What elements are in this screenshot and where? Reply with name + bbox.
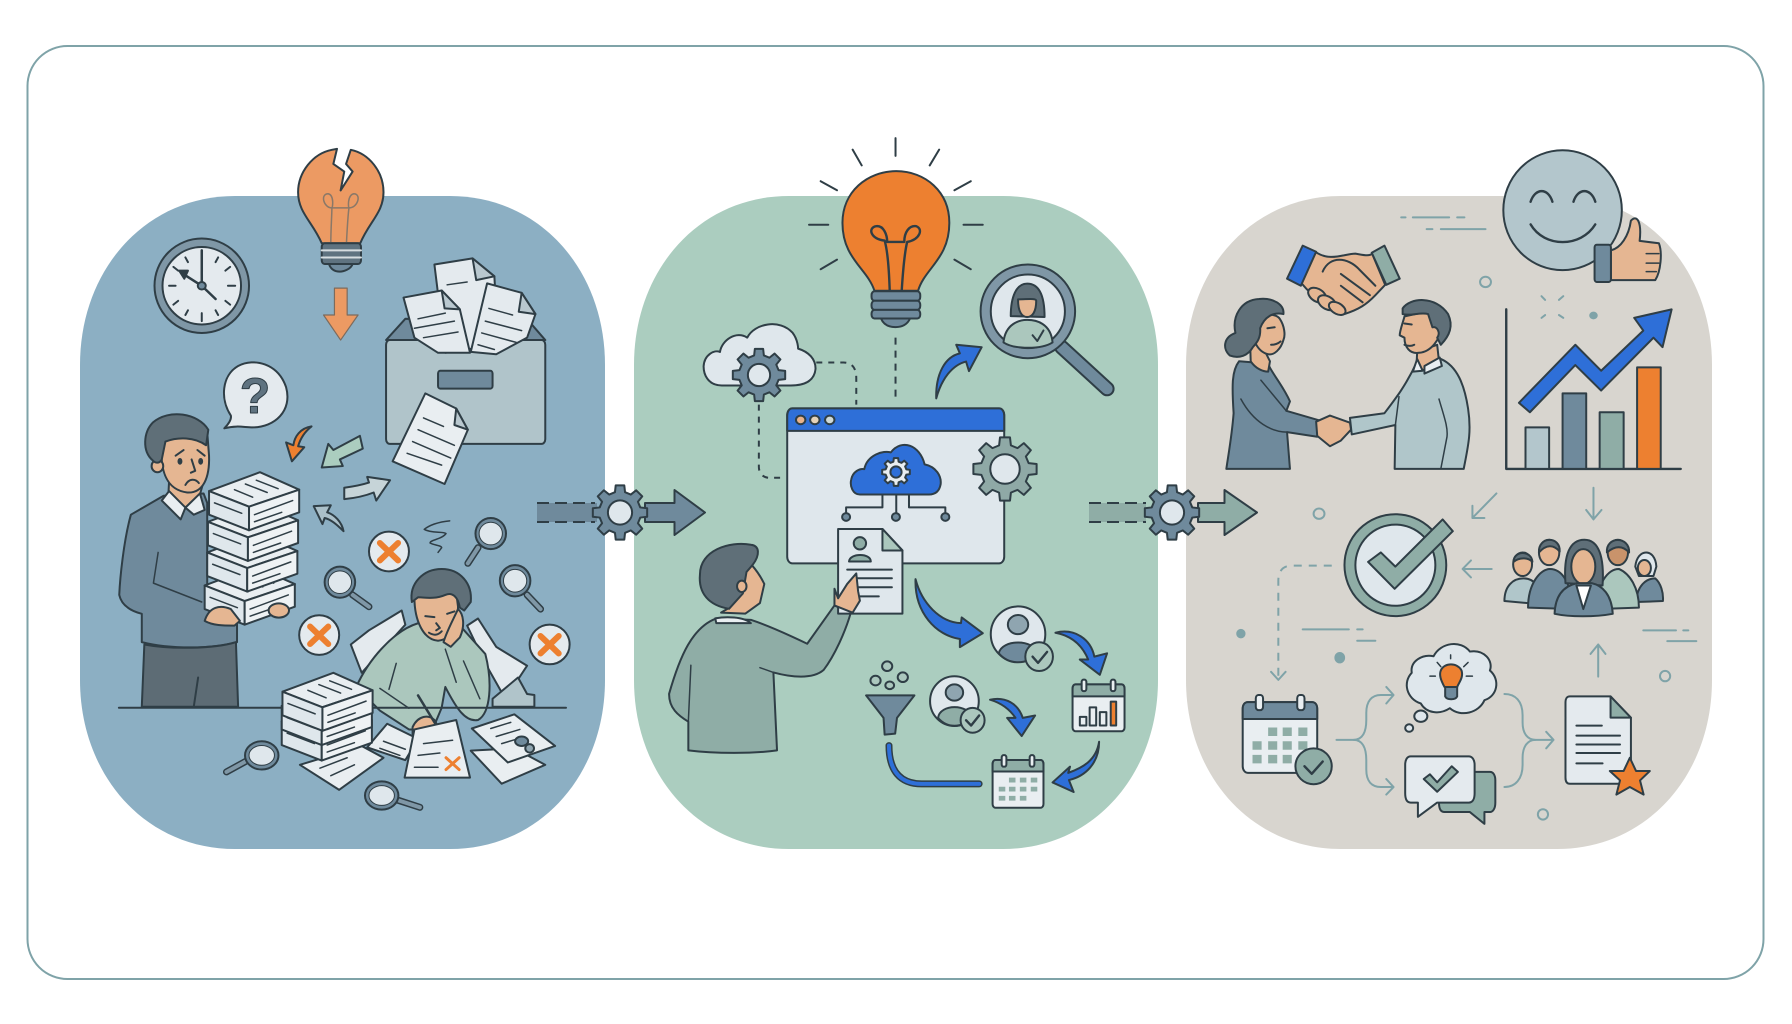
decorative rings and dots <box>1237 277 1670 820</box>
arrow: blue to chart calendar <box>1055 632 1107 675</box>
icon: x badge left <box>299 615 339 655</box>
icon: shaking hands close up <box>1316 416 1351 446</box>
icon: approval check ring <box>1344 514 1453 616</box>
icon: x badge right <box>530 625 570 664</box>
arrow: blue to calendar <box>1053 742 1099 792</box>
icon: user check two <box>930 676 985 733</box>
icon: calendar with check <box>1243 695 1332 784</box>
connector: problem to solution <box>537 485 705 540</box>
icon: magnifier top right <box>468 518 506 563</box>
arrows: flow between items <box>1463 488 1605 677</box>
arrow: pale right <box>344 477 390 501</box>
dashed connector: cloud to window top <box>816 362 856 405</box>
connector: solution to outcome <box>1089 485 1257 540</box>
arrow: blue up to magnifier <box>936 345 982 398</box>
desk papers <box>300 714 555 790</box>
decorative dashes <box>1303 217 1696 641</box>
arrow: blue short <box>990 699 1035 736</box>
icon: document with star <box>1565 696 1650 795</box>
brackets: branching flow <box>1336 687 1553 795</box>
icon: chat bubbles <box>1405 756 1495 824</box>
icon: handshake <box>1287 246 1400 318</box>
arrow: back to stack <box>314 505 344 531</box>
icon: thumbs up <box>1595 218 1661 282</box>
icon: desk paper stack <box>282 673 373 761</box>
dashed flow arrow to calendar <box>1271 566 1332 680</box>
icon: clock <box>155 239 249 333</box>
icon: magnifier on desk bottom <box>365 781 420 810</box>
panel: problem background <box>80 196 605 849</box>
icon: white gear in blue cloud <box>882 458 910 486</box>
panel: solution background <box>634 196 1158 849</box>
icon: smiley face <box>1503 150 1622 270</box>
icon: cloud <box>704 324 816 385</box>
icon: stress squiggle <box>424 521 450 552</box>
arrow: green curved <box>322 436 363 467</box>
icon: magnifier with candidate <box>981 264 1107 389</box>
icon: calendar with bars <box>1073 680 1125 731</box>
arrow: blue return curve <box>889 746 979 784</box>
figure: man shaking hands <box>1350 300 1470 469</box>
dashed connector: cloud to window side <box>759 405 784 478</box>
panel: problem illustration <box>119 149 570 810</box>
panel: outcome illustration <box>1225 150 1696 824</box>
dashed connector: bulb to window <box>895 338 897 402</box>
icon: overflowing filing box <box>386 258 545 484</box>
arrow: orange down <box>324 288 358 340</box>
figure: woman shaking hands <box>1225 299 1319 469</box>
icon: magnifier on desk left <box>226 741 278 772</box>
figure: person pointing at document <box>669 529 902 753</box>
icon: bright light bulb <box>809 138 983 327</box>
arrow: orange curved <box>286 426 312 461</box>
icon: large gear on window <box>973 437 1037 501</box>
desk line <box>119 707 566 709</box>
icon: user check one <box>991 606 1053 671</box>
chart: growth bars <box>1506 309 1681 469</box>
arrow: blue to user <box>915 579 983 647</box>
panel: solution illustration <box>669 138 1125 808</box>
icon: question bubble <box>224 362 287 428</box>
figure: seated tired man <box>351 569 534 734</box>
icon: calendar grid <box>993 755 1043 808</box>
icon: thought cloud with bulb <box>1405 644 1496 732</box>
icon: magnifier right <box>500 565 541 609</box>
icon: x badge top <box>369 532 409 571</box>
icon: funnel <box>866 661 914 735</box>
panel: outcome background <box>1186 196 1712 849</box>
figure: standing man with paper stack <box>119 414 299 707</box>
icon: team group <box>1504 540 1663 616</box>
panel: browser window <box>787 408 1004 563</box>
icon: gear on cloud <box>733 349 785 401</box>
icon: magnifier centre <box>325 567 369 607</box>
icon: broken light bulb <box>298 149 384 272</box>
question mark: ? <box>240 368 270 424</box>
